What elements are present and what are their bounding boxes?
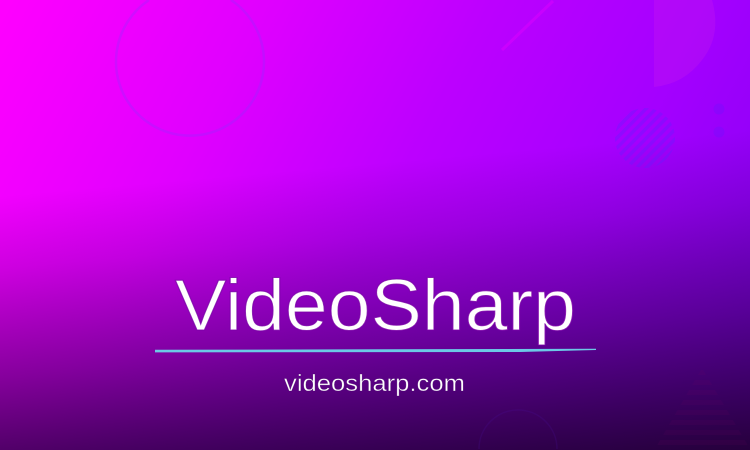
decoration: striped triangle <box>655 368 750 449</box>
decoration: bottom circle outline <box>479 410 557 449</box>
decoration: striped circle <box>615 108 675 168</box>
underline <box>155 349 596 352</box>
title: VideoSharp <box>175 266 576 346</box>
decoration: diagonal streak top centre <box>502 1 553 50</box>
decoration: translucent half circle <box>654 0 715 87</box>
decoration: large circle outline <box>116 0 264 136</box>
decoration: small dots <box>714 104 724 138</box>
domain: videosharp.com <box>284 370 465 396</box>
